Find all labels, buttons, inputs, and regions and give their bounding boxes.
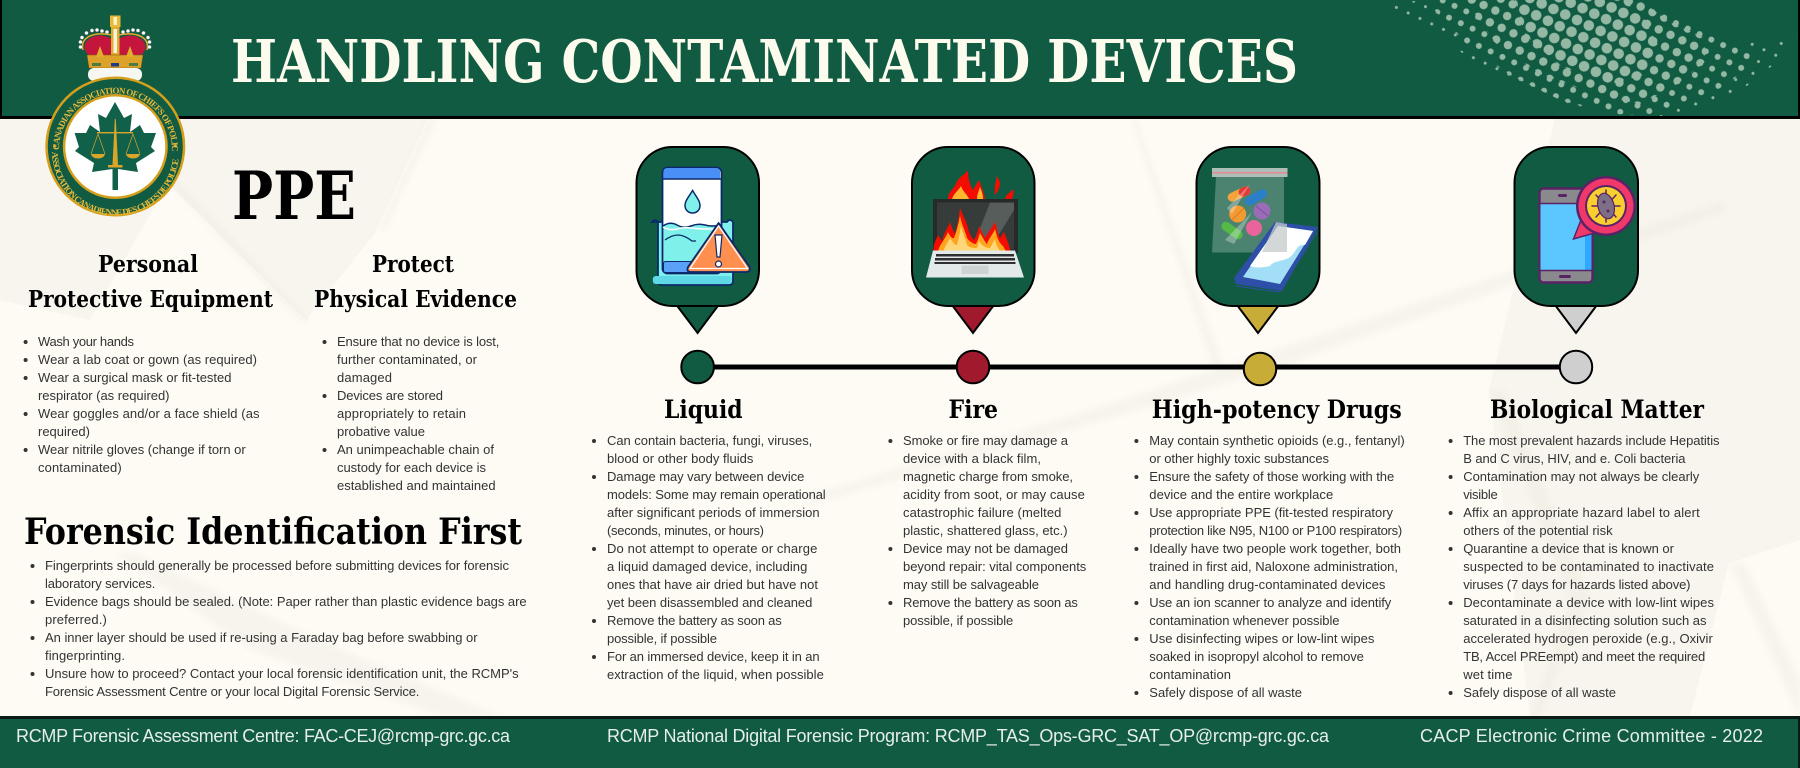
heading: protect physical evidence: Protect [372, 250, 454, 278]
panel: forensic identification first [24, 511, 527, 699]
pin: fire [912, 147, 1034, 333]
list: fire guidance: Device may not be damaged [903, 541, 1068, 556]
list: drugs guidance: contamination [1149, 667, 1231, 682]
list: drugs guidance: May contain synthetic opioids (e.g., fentanyl) [1149, 433, 1405, 448]
list: fire guidance: may still be salvageable [903, 577, 1039, 592]
list: forensic steps: laboratory services. [45, 576, 155, 591]
pin: liquid [636, 147, 759, 333]
list: ppe steps: Wear a lab coat or gown (as required) [38, 352, 257, 367]
heading: protect physical evidence: Physical Evidence [314, 285, 517, 313]
panel: protect physical evidence [314, 250, 517, 493]
list: evidence steps: established and maintained [337, 478, 496, 493]
icon: bagged pills and phone [1212, 168, 1318, 292]
list: ppe steps [24, 334, 260, 475]
list: fire guidance [888, 433, 1087, 628]
heading: protect physical evidence [314, 250, 517, 313]
heading: biological matter: Biological Matter [1490, 395, 1705, 424]
pin: drugs [1196, 147, 1320, 333]
list: biological guidance: suspected to be contaminated to inactivate [1463, 559, 1714, 574]
footer contact: forensic assessment centre: RCMP Forensic Assessment Centre: FAC-CEJ@rcmp-grc.gc.ca [16, 726, 511, 746]
list: fire guidance: plastic, shattered glass, etc.) [903, 523, 1068, 538]
list: liquid guidance: a liquid damaged device, including [607, 559, 807, 574]
heading: liquid: Liquid [664, 395, 743, 424]
list: biological guidance: Quarantine a device that is known or [1463, 541, 1675, 556]
header banner [0, 0, 1800, 119]
list: drugs guidance: or other highly toxic substances [1149, 451, 1330, 466]
list: evidence steps: probative value [337, 424, 425, 439]
icon: phone in water with warning [652, 168, 750, 285]
heading: high-potency drugs: High-potency Drugs [1152, 395, 1402, 424]
timeline line [697, 364, 1576, 370]
icon: CACP crest logo [45, 16, 186, 216]
list: fire guidance: Smoke or fire may damage a [903, 433, 1069, 448]
timeline node: fire [957, 351, 989, 383]
panel: personal protective equipment [24, 250, 273, 475]
maple leaf with scales [75, 102, 156, 190]
list: drugs guidance: Ideally have two people work together, both [1149, 541, 1401, 556]
list: biological guidance: Contamination may not always be clearly [1463, 469, 1700, 484]
list: biological guidance: TB, Accel PREempt) and meet the required [1463, 649, 1705, 664]
list: liquid guidance: Remove the battery as soon as [607, 613, 782, 628]
list: liquid guidance [592, 433, 826, 682]
list: drugs guidance: contamination whenever possible [1149, 613, 1340, 628]
footer bar [0, 716, 1800, 768]
list: drugs guidance: Safely dispose of all waste [1149, 685, 1302, 700]
list: liquid guidance: extraction of the liquid, when possible [607, 667, 824, 682]
halftone dot wave [1393, 0, 1797, 116]
list: liquid guidance: For an immersed device, keep it in an [607, 649, 820, 664]
seal ring [45, 76, 186, 216]
list: biological guidance: Decontaminate a device with low-lint wipes [1463, 595, 1714, 610]
list: ppe steps: Wear goggles and/or a face shield (as [38, 406, 260, 421]
list: fire guidance: possible, if possible [903, 613, 1013, 628]
list: forensic steps: preferred.) [45, 612, 107, 627]
panel: fire [888, 147, 1087, 628]
list: fire guidance: magnetic charge from smoke, [903, 469, 1073, 484]
list: fire guidance: beyond repair: vital components [903, 559, 1087, 574]
list: drugs guidance: device and the entire workplace [1149, 487, 1333, 502]
list: drugs guidance: protection like N95, N100 or P100 respirators) [1149, 523, 1402, 538]
list: drugs guidance: soaked in isopropyl alcohol to remove [1149, 649, 1364, 664]
list: ppe steps: respirator (as required) [38, 388, 170, 403]
list: drugs guidance: Use appropriate PPE (fit-tested respiratory [1149, 505, 1394, 520]
pin: biological [1514, 147, 1638, 333]
list: biological guidance: viruses (7 days for hazards listed above) [1463, 577, 1690, 592]
list: liquid guidance: possible, if possible [607, 631, 717, 646]
seal ring: ASSOCIATION CANADIENNE DES CHEFS DE POLICE [52, 152, 179, 216]
timeline node: drugs [1244, 353, 1276, 385]
list: evidence steps: custody for each device is [337, 460, 486, 475]
panel: liquid [592, 147, 826, 682]
heading: PPE: PPE [232, 157, 356, 235]
list: biological guidance: accelerated hydrogen peroxide (e.g., Oxivir [1463, 631, 1713, 646]
list: liquid guidance: models: Some may remain operational [607, 487, 826, 502]
list: biological guidance: B and C virus, HIV, and e. Coli bacteria [1463, 451, 1686, 466]
list: ppe steps: Wear a surgical mask or fit-tested [38, 370, 232, 385]
heading: forensic identification first: Forensic Identification First [24, 511, 522, 553]
list: biological guidance [1449, 433, 1720, 700]
list: forensic steps: An inner layer should be used if re-using a Faraday bag before swabbing or [45, 630, 478, 645]
list: liquid guidance: yet been disassembled and cleaned [607, 595, 812, 610]
list: evidence steps [322, 334, 499, 493]
list: evidence steps: damaged [337, 370, 392, 385]
list: fire guidance: Remove the battery as soon as [903, 595, 1078, 610]
timeline node: liquid [681, 351, 714, 383]
list: liquid guidance: Can contain bacteria, fungi, viruses, [607, 433, 812, 448]
list: biological guidance: saturated in a disinfecting solution such as [1463, 613, 1707, 628]
list: forensic steps: Unsure how to proceed? Contact your local forensic identification unit, the RCMP's [45, 666, 519, 681]
list: liquid guidance: (seconds, minutes, or hours) [607, 523, 764, 538]
list: evidence steps: Ensure that no device is lost, [337, 334, 499, 349]
list: biological guidance: others of the potential risk [1463, 523, 1613, 538]
list: drugs guidance: Use disinfecting wipes or low-lint wipes [1149, 631, 1375, 646]
heading: personal protective equipment: Personal [98, 250, 198, 278]
icon: laptop on fire [926, 170, 1024, 278]
list: drugs guidance [1134, 433, 1405, 700]
footer contact: national digital forensic program: RCMP National Digital Forensic Program: RCMP_TAS_Ops-GRC_SAT_OP@rcmp-grc.gc.ca [607, 726, 1330, 747]
timeline node: biological [1560, 351, 1592, 383]
list: drugs guidance: Ensure the safety of those working with the [1149, 469, 1394, 484]
list: drugs guidance: Use an ion scanner to analyze and identify [1149, 595, 1392, 610]
list: biological guidance: Safely dispose of all waste [1463, 685, 1616, 700]
list: forensic steps: Fingerprints should generally be processed before submitting devices for forensic [45, 558, 510, 573]
list: forensic steps: Forensic Assessment Centre or your local Digital Forensic Service. [45, 684, 419, 699]
list: liquid guidance: Do not attempt to operate or charge [607, 541, 817, 556]
list: forensic steps [30, 558, 527, 699]
list: liquid guidance: after significant periods of immersion [607, 505, 820, 520]
list: ppe steps: contaminated) [38, 460, 122, 475]
list: fire guidance: acidity from soot, or may cause [903, 487, 1085, 502]
list: liquid guidance: Damage may vary between device [607, 469, 804, 484]
list: biological guidance: wet time [1462, 667, 1512, 682]
list: forensic steps: Evidence bags should be sealed. (Note: Paper rather than plastic evidence bags are [45, 594, 527, 609]
panel: biological matter [1449, 147, 1720, 700]
list: evidence steps: An unimpeachable chain of [337, 442, 494, 457]
list: biological guidance: Affix an appropriate hazard label to alert [1463, 505, 1700, 520]
list: forensic steps: fingerprinting. [45, 648, 125, 663]
list: biological guidance: visible [1463, 487, 1498, 502]
list: fire guidance: device with a black film, [903, 451, 1041, 466]
crown [79, 16, 151, 81]
list: evidence steps: appropriately to retain [337, 406, 466, 421]
heading: fire: Fire [948, 395, 998, 424]
list: liquid guidance: ones that have air dried but have not [607, 577, 818, 592]
panel: high-potency drugs [1134, 147, 1405, 700]
list: ppe steps: Wash your hands [38, 334, 134, 349]
footer credit: CACP Electronic Crime Committee - 2022 [1420, 726, 1763, 746]
list: evidence steps: further contaminated, or [337, 352, 478, 367]
heading: personal protective equipment: Protective Equipment [28, 285, 273, 313]
icon: phone with germ bubble [1540, 176, 1636, 282]
list: drugs guidance: trained in first aid, Naloxone administration, [1149, 559, 1398, 574]
list: drugs guidance: and handling drug-contaminated devices [1149, 577, 1386, 592]
list: biological guidance: The most prevalent hazards include Hepatitis [1463, 433, 1720, 448]
heading: personal protective equipment [28, 250, 273, 313]
list: fire guidance: catastrophic failure (melted [903, 505, 1061, 520]
title: HANDLING CONTAMINATED DEVICES [231, 27, 1298, 96]
list: ppe steps: required) [38, 424, 90, 439]
list: evidence steps: Devices are stored [337, 388, 443, 403]
list: liquid guidance: blood or other body fluids [607, 451, 754, 466]
list: ppe steps: Wear nitrile gloves (change if torn or [38, 442, 246, 457]
